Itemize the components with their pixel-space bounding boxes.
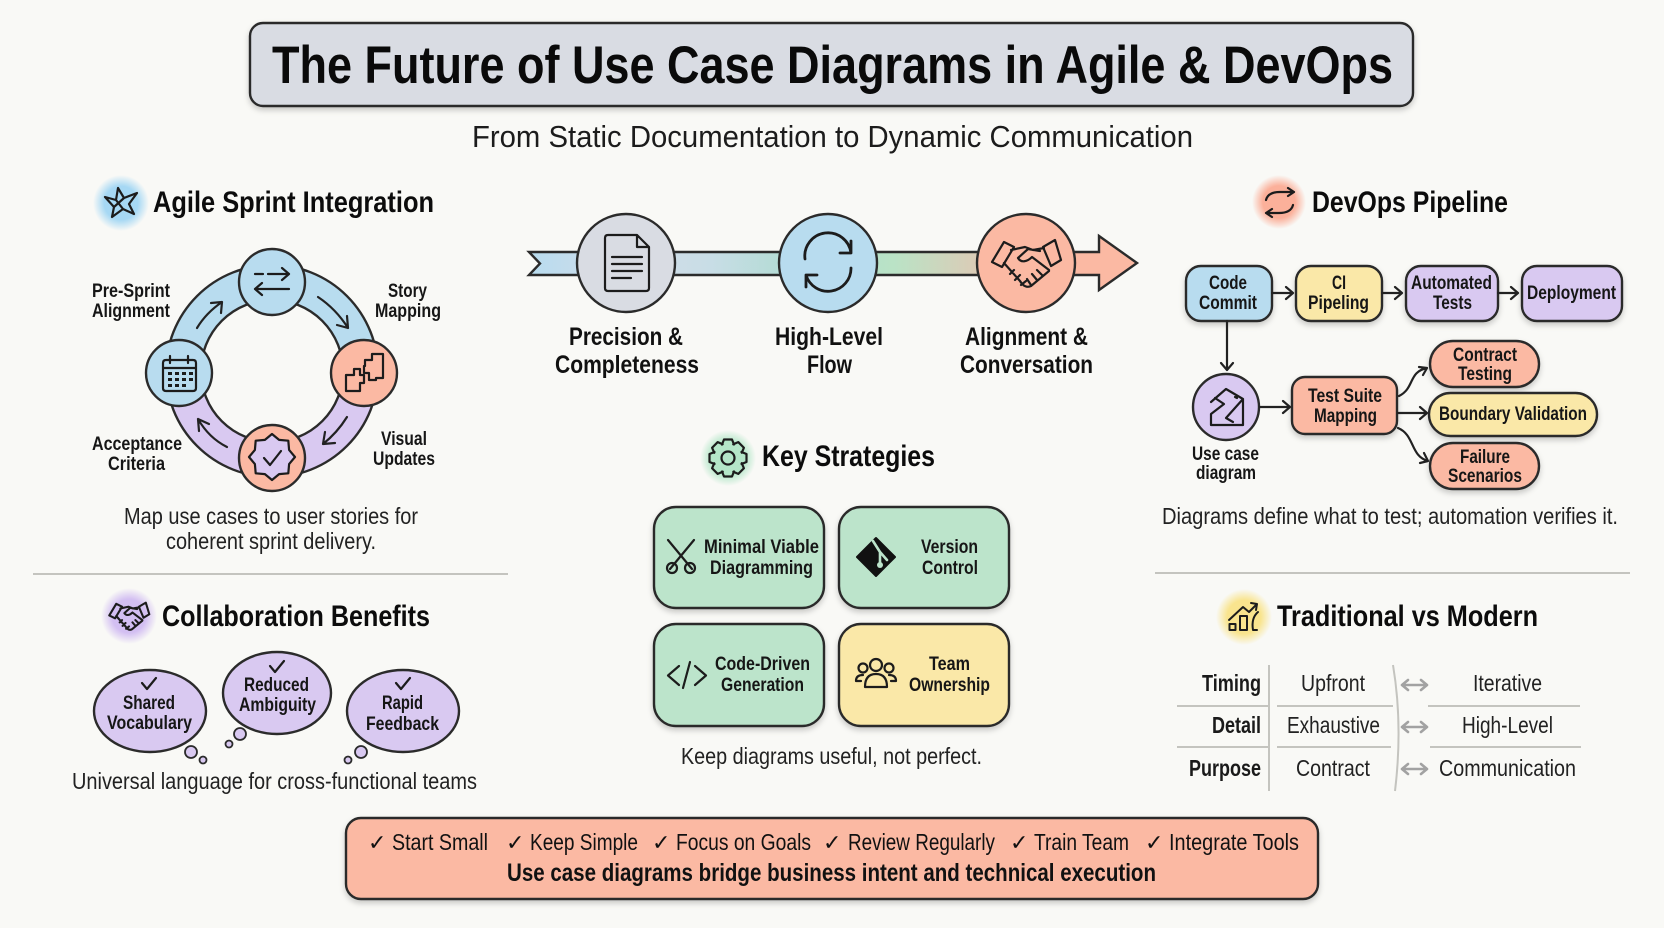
pill: boundary validation: Boundary Validation	[1439, 403, 1587, 425]
box: deployment: Deployment	[1527, 282, 1616, 304]
pill: contract testing	[1430, 341, 1539, 387]
checklist: Train Team	[1034, 829, 1129, 855]
panel: traditional vs modern	[1177, 589, 1581, 791]
card: team ownership	[839, 624, 1009, 726]
ring labels	[92, 280, 441, 475]
card: version control: Version	[921, 536, 978, 558]
card: code-driven generation: Generation	[721, 674, 804, 696]
stage labels: Conversation	[960, 351, 1093, 379]
icon: agile star	[93, 175, 149, 231]
card: version control: Control	[922, 557, 978, 579]
checklist: Integrate Tools	[1169, 829, 1299, 855]
bubble: shared vocabulary: Vocabulary	[107, 712, 192, 734]
row: detail: Exhaustive	[1287, 712, 1380, 738]
heading: Collaboration Benefits	[162, 600, 430, 633]
node: calendar	[146, 340, 212, 406]
heading: Traditional vs Modern	[1277, 600, 1538, 633]
pill: boundary validation	[1429, 393, 1597, 436]
panel: devops pipeline	[1162, 175, 1622, 529]
checklist: Keep Simple	[530, 829, 638, 855]
node: use case diagram: Use case	[1192, 443, 1259, 465]
checklist	[368, 829, 1299, 856]
subtitle: From Static Documentation to Dynamic Communication	[472, 119, 1193, 154]
title banner	[250, 23, 1413, 106]
row: purpose: Contract	[1296, 755, 1371, 781]
bubble: rapid feedback: Rapid	[382, 692, 423, 714]
ring labels: Updates	[373, 448, 435, 470]
card: code-driven generation: Code-Driven	[715, 653, 810, 675]
pill: failure scenarios: Scenarios	[1448, 465, 1522, 487]
pill: failure scenarios: Failure	[1460, 446, 1510, 468]
circle: sync	[779, 214, 877, 312]
ring labels: Pre-Sprint	[92, 280, 170, 302]
description	[124, 503, 418, 554]
row: detail	[1212, 712, 1553, 738]
pill: failure scenarios	[1430, 443, 1539, 489]
card: code-driven generation	[654, 624, 824, 726]
card: minimal viable diagramming: Minimal Viable	[704, 536, 819, 558]
arrows: top row	[1272, 287, 1518, 299]
row: detail: Detail	[1212, 712, 1261, 738]
box: test suite mapping: Test Suite	[1308, 385, 1382, 407]
description: coherent sprint delivery.	[166, 528, 376, 554]
description: Map use cases to user stories for	[124, 503, 418, 529]
row: timing: Timing	[1202, 670, 1261, 696]
pill: contract testing: Testing	[1458, 363, 1512, 385]
icon: devops cycle	[1252, 175, 1306, 229]
icon: gear	[700, 430, 756, 486]
checklist: Start Small	[392, 829, 488, 855]
arrows: test branches	[1398, 367, 1428, 463]
sprint cycle ring	[146, 249, 397, 491]
ring labels: Story	[388, 280, 427, 302]
title banner: The Future of Use Case Diagrams in Agile & DevOps	[272, 36, 1393, 95]
checklist: Review Regularly	[848, 829, 995, 855]
arrow: use case to mapping	[1260, 401, 1290, 413]
checklist: ✓	[506, 831, 524, 856]
circle: document	[577, 214, 675, 312]
box: deployment	[1522, 266, 1622, 321]
panel: evolution flow	[529, 214, 1137, 379]
row: purpose	[1189, 755, 1576, 781]
row: detail: High-Level	[1462, 712, 1553, 738]
card: minimal viable diagramming	[654, 507, 824, 608]
heading: DevOps Pipeline	[1312, 186, 1508, 219]
bubble: reduced ambiguity: Reduced	[244, 674, 309, 696]
node: puzzle	[331, 340, 397, 406]
heading: Key Strategies	[762, 440, 935, 473]
bubble: reduced ambiguity: Ambiguity	[239, 694, 316, 716]
card: minimal viable diagramming: Diagramming	[710, 557, 813, 579]
bubble: shared vocabulary	[94, 670, 206, 764]
box: code commit	[1186, 266, 1272, 321]
node: use case diagram: diagram	[1196, 462, 1256, 484]
node: alignment arrows	[239, 249, 305, 315]
row: purpose: Purpose	[1189, 755, 1261, 781]
stage labels: Flow	[807, 351, 852, 379]
panel: agile sprint integration	[92, 175, 441, 554]
ring labels: Mapping	[375, 300, 441, 322]
bottom takeaway banner	[346, 818, 1318, 899]
row: purpose: Communication	[1439, 755, 1576, 781]
arrow: commit to use case	[1221, 321, 1233, 370]
panel: key strategies	[654, 430, 1009, 769]
ring labels: Visual	[381, 428, 427, 450]
checklist: ✓	[652, 831, 670, 856]
bubble: reduced ambiguity	[223, 652, 331, 748]
row: timing: Upfront	[1301, 670, 1366, 696]
bubble: rapid feedback	[344, 670, 459, 764]
box: code commit: Code	[1209, 272, 1247, 294]
stage labels	[555, 323, 1093, 379]
box: code commit: Commit	[1199, 292, 1257, 314]
checklist: ✓	[368, 831, 386, 856]
box: ci pipeling	[1296, 266, 1382, 321]
heading: Agile Sprint Integration	[153, 186, 434, 219]
node: use case diagram	[1192, 374, 1259, 484]
row: timing	[1202, 670, 1542, 696]
checklist: ✓	[1010, 831, 1028, 856]
checklist: ✓	[823, 831, 841, 856]
checklist: Focus on Goals	[676, 829, 811, 855]
stage labels: Alignment &	[965, 323, 1088, 351]
box: automated tests	[1406, 266, 1498, 321]
box: ci pipeling: Pipeling	[1308, 292, 1369, 314]
box: ci pipeling: CI	[1332, 272, 1346, 294]
card: version control	[839, 507, 1009, 608]
stage labels: High-Level	[775, 323, 883, 351]
icon: growth chart	[1216, 589, 1272, 645]
icon: handshake	[101, 588, 157, 644]
box: automated tests: Tests	[1433, 292, 1472, 314]
circle: handshake	[977, 214, 1075, 312]
ring labels: Alignment	[92, 300, 170, 322]
stage labels: Precision &	[569, 323, 683, 351]
card: team ownership: Ownership	[909, 674, 990, 696]
row: timing: Iterative	[1473, 670, 1542, 696]
takeaway statement: Use case diagrams bridge business intent and technical execution	[507, 859, 1156, 887]
node: approval badge	[239, 425, 305, 491]
card: team ownership: Team	[929, 653, 970, 675]
description: Keep diagrams useful, not perfect.	[681, 743, 982, 769]
ring labels: Acceptance	[92, 433, 182, 455]
comparison table	[1177, 665, 1581, 791]
panel: collaboration benefits	[72, 588, 477, 794]
box: test suite mapping	[1292, 377, 1397, 434]
box: automated tests: Automated	[1411, 272, 1492, 294]
checklist: ✓	[1145, 831, 1163, 856]
box: test suite mapping: Mapping	[1314, 405, 1377, 427]
bubble: rapid feedback: Feedback	[366, 713, 439, 735]
ring labels: Criteria	[108, 453, 165, 475]
description: Universal language for cross-functional teams	[72, 768, 477, 794]
stage labels: Completeness	[555, 351, 699, 379]
pill: contract testing: Contract	[1453, 344, 1517, 366]
bubble: shared vocabulary: Shared	[123, 692, 175, 714]
ribbon arrow	[529, 236, 1137, 290]
